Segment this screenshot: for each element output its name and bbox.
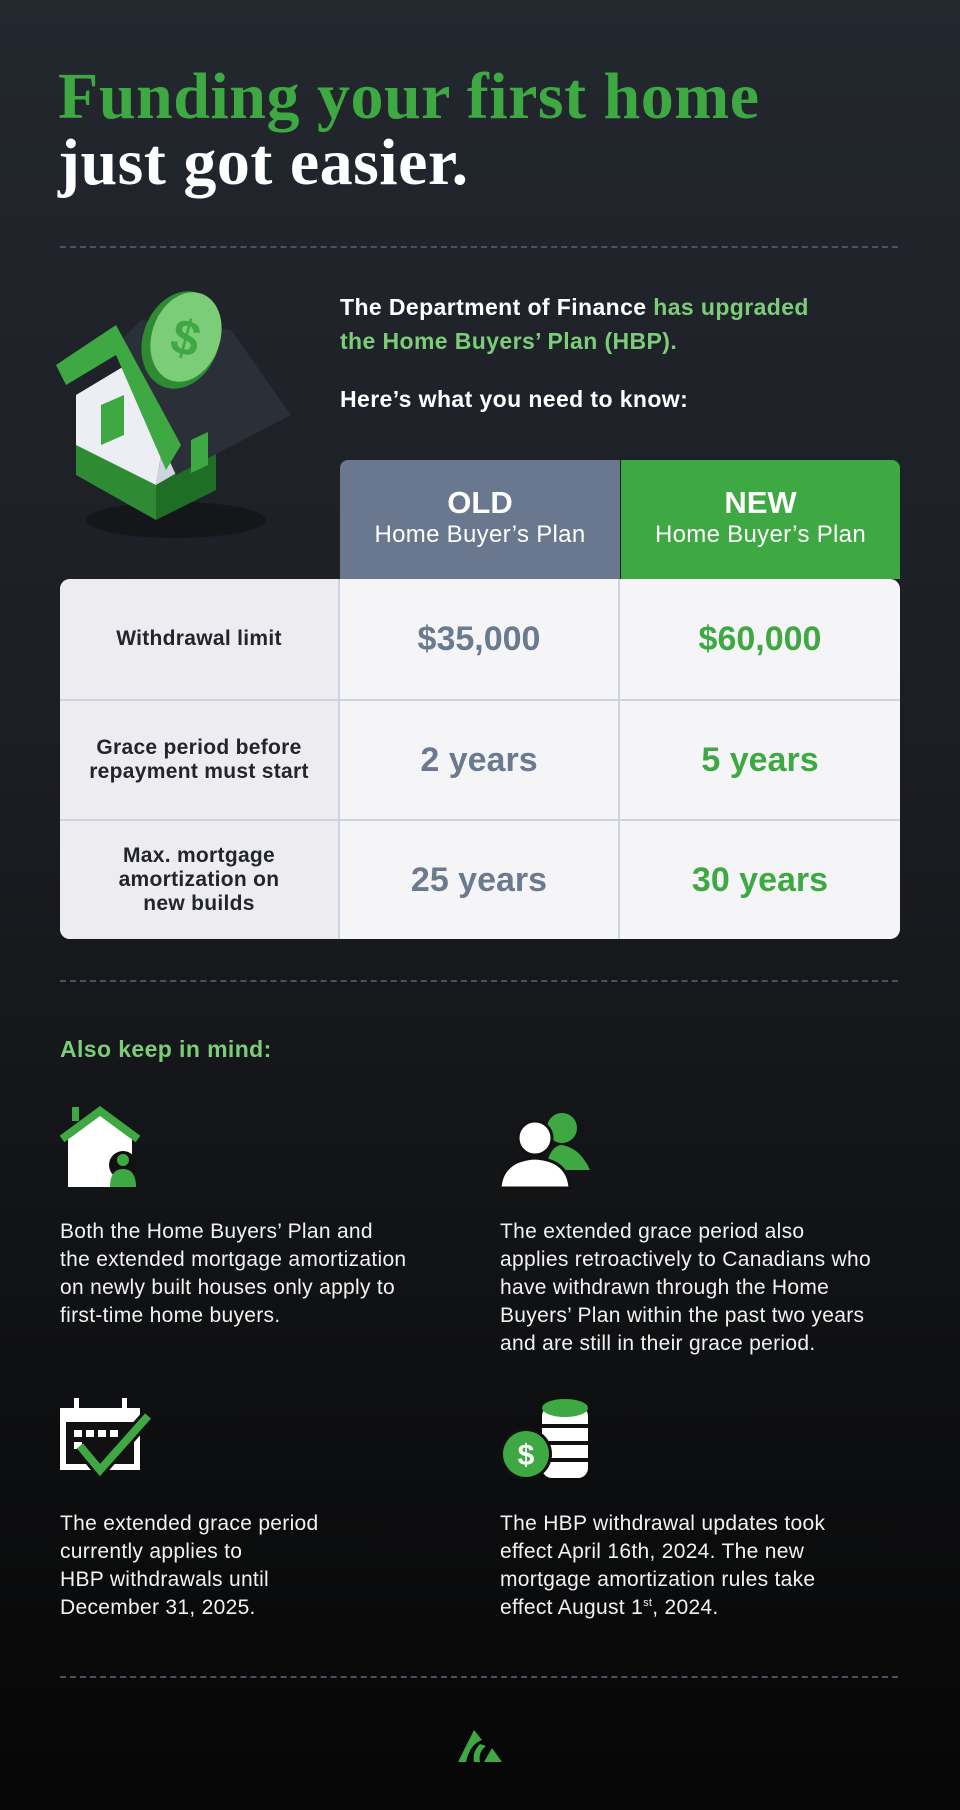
icon: calendar check bbox=[60, 1398, 151, 1476]
note 1: first-time home buyers. bbox=[60, 1304, 280, 1327]
note 2: applies retroactively to Canadians who bbox=[500, 1248, 871, 1271]
table body bbox=[60, 579, 900, 939]
row: withdrawal limit: Withdrawal limit bbox=[116, 627, 282, 650]
row: withdrawal limit bbox=[60, 579, 821, 699]
row: grace period bbox=[60, 699, 900, 819]
row: withdrawal limit: $35,000 bbox=[418, 620, 540, 658]
note 1: on newly built houses only apply to bbox=[60, 1276, 395, 1299]
row: amortization: 30 years bbox=[692, 860, 828, 898]
note 4: The HBP withdrawal updates took bbox=[500, 1512, 825, 1535]
intro text: Here’s what you need to know: bbox=[340, 386, 688, 412]
note 4: effect August 1st, 2024. bbox=[500, 1596, 719, 1619]
header: old bbox=[340, 460, 620, 579]
note 3 bbox=[60, 1512, 319, 1619]
row: amortization: 25 years bbox=[411, 860, 547, 898]
row: grace period: Grace period before bbox=[96, 736, 302, 759]
row: amortization: Max. mortgage bbox=[123, 844, 275, 867]
illustration: house with coin bbox=[56, 291, 291, 538]
header: new: Home Buyer’s Plan bbox=[655, 521, 866, 548]
icon: people bbox=[502, 1113, 590, 1186]
note 1: the extended mortgage amortization bbox=[60, 1248, 406, 1271]
note 4: effect April 16th, 2024. The new bbox=[500, 1540, 804, 1563]
title: Funding your first home bbox=[58, 60, 760, 133]
title: just got easier. bbox=[58, 126, 469, 199]
note 1: Both the Home Buyers’ Plan and bbox=[60, 1220, 373, 1243]
row: grace period: 2 years bbox=[420, 740, 538, 778]
icon: coins bbox=[503, 1399, 588, 1478]
note 3: December 31, 2025. bbox=[60, 1596, 256, 1619]
note 4 bbox=[500, 1512, 825, 1619]
header: new bbox=[621, 460, 900, 579]
note 2: and are still in their grace period. bbox=[500, 1332, 815, 1355]
header: old: Home Buyer’s Plan bbox=[374, 521, 585, 548]
title bbox=[57, 60, 760, 199]
row: grace period: 5 years bbox=[701, 740, 819, 778]
row: amortization bbox=[60, 819, 900, 939]
note 4: mortgage amortization rules take bbox=[500, 1568, 815, 1591]
note 2: The extended grace period also bbox=[500, 1220, 804, 1243]
note 3: HBP withdrawals until bbox=[60, 1568, 269, 1591]
note 2: have withdrawn through the Home bbox=[500, 1276, 829, 1299]
heading: also keep in mind: Also keep in mind: bbox=[60, 1036, 272, 1062]
illustration: house with coin: $ bbox=[165, 307, 207, 369]
row: grace period: repayment must start bbox=[89, 760, 309, 783]
icon: house with person bbox=[60, 1106, 140, 1187]
note 1 bbox=[60, 1220, 406, 1327]
comparison table bbox=[60, 460, 900, 939]
header: old: OLD bbox=[447, 485, 513, 520]
row: amortization: amortization on bbox=[119, 868, 279, 891]
row: amortization: new builds bbox=[143, 892, 255, 915]
note 2 bbox=[500, 1220, 871, 1355]
note 2: Buyers’ Plan within the past two years bbox=[500, 1304, 864, 1327]
intro text bbox=[340, 294, 809, 412]
note 3: currently applies to bbox=[60, 1540, 242, 1563]
row: withdrawal limit: $60,000 bbox=[699, 620, 821, 658]
header: new: NEW bbox=[724, 485, 797, 520]
logo bbox=[458, 1730, 502, 1762]
intro text: The Department of Finance has upgraded bbox=[340, 294, 809, 320]
icon: coins: $ bbox=[518, 1439, 535, 1472]
intro text: the Home Buyers’ Plan (HBP). bbox=[340, 328, 677, 354]
note 3: The extended grace period bbox=[60, 1512, 319, 1535]
